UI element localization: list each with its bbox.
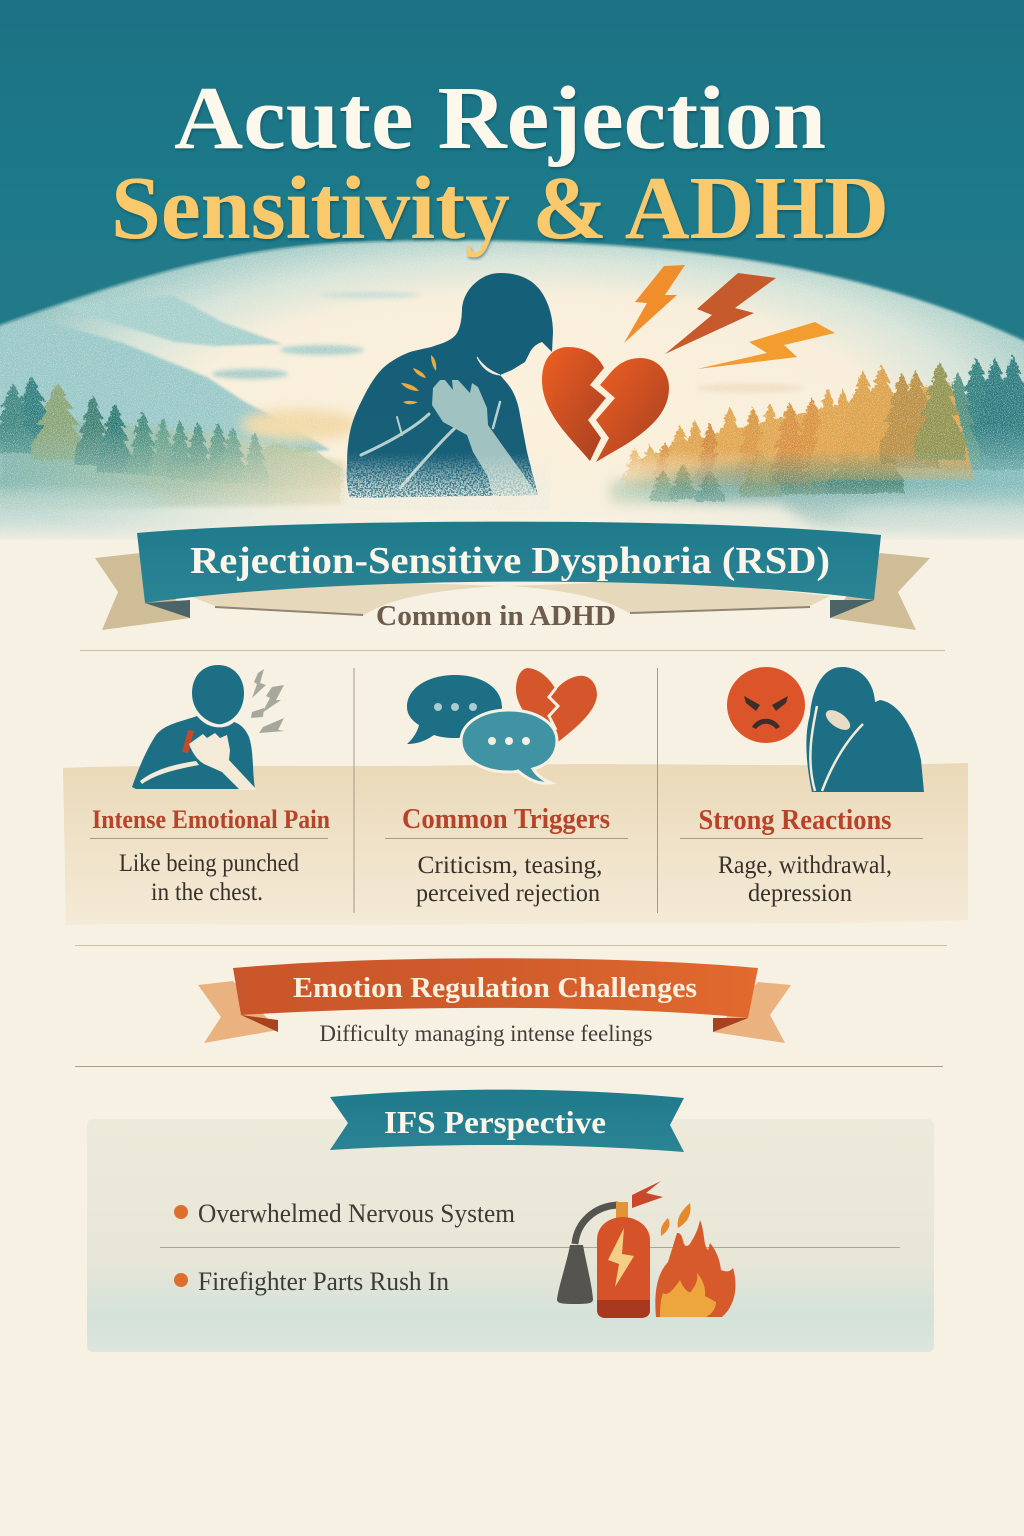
column 1: intense emotional pain <box>90 805 330 906</box>
broken heart <box>542 347 669 462</box>
lightning bolts <box>624 265 835 369</box>
title: Acute Rejection <box>174 69 826 168</box>
icon: speech bubbles and heart <box>407 668 597 783</box>
mountains <box>0 295 330 452</box>
spray <box>632 1181 663 1208</box>
hand and arm <box>189 733 257 790</box>
hero figure clutching chest <box>340 273 553 510</box>
right green understory <box>648 453 905 502</box>
arm and hand <box>432 380 538 495</box>
flame <box>655 1220 735 1317</box>
panel: IFS perspective <box>87 1119 934 1352</box>
icon: fire extinguisher and flame <box>557 1181 735 1318</box>
nozzle <box>557 1245 593 1304</box>
left forest mist <box>0 418 345 510</box>
title: Sensitivity & ADHD <box>111 159 889 258</box>
divider middle <box>75 945 947 946</box>
pain marks <box>401 355 436 404</box>
subtitle: difficulty managing: Difficulty managing intense feelings <box>320 1021 653 1046</box>
valve <box>616 1202 628 1218</box>
left forest trees <box>0 377 345 490</box>
divider column 2 <box>657 668 658 913</box>
divider top <box>80 650 945 651</box>
red pain bar <box>182 730 194 753</box>
panel: three column card <box>63 763 968 925</box>
column 1: intense emotional pain: Intense Emotional Pain <box>92 805 330 834</box>
column 1: intense emotional pain: in the chest. <box>151 879 263 906</box>
body crease lines <box>361 402 500 488</box>
subtitle: common in ADHD: Common in ADHD <box>376 600 616 632</box>
neck highlight <box>477 357 500 375</box>
banner: emotion regulation <box>198 958 791 1043</box>
divider lower <box>75 1066 943 1067</box>
panel row divider <box>160 1247 900 1248</box>
grey shock marks <box>251 669 285 733</box>
hero landscape <box>0 240 1024 540</box>
banner: RSD: Rejection-Sensitive Dysphoria (RSD) <box>190 540 830 582</box>
column 2: common triggers: Criticism, teasing, <box>418 852 602 879</box>
heart <box>516 668 597 742</box>
ribbon tails <box>95 553 190 630</box>
banner: emotion regulation: Emotion Regulation Challenges <box>293 972 697 1004</box>
column 3: strong reactions: Strong Reactions <box>698 805 892 836</box>
title <box>111 69 889 258</box>
banner: RSD <box>95 522 930 630</box>
ribbon folds <box>145 600 190 618</box>
ribbon swoop <box>190 580 500 616</box>
withdrawn person <box>806 667 924 792</box>
right teal trees <box>936 355 1024 470</box>
angry face <box>727 667 805 743</box>
header band <box>0 0 1024 356</box>
bullet: overwhelmed nervous system: Overwhelmed Nervous System <box>198 1199 515 1228</box>
column 2: common triggers: Common Triggers <box>402 804 610 835</box>
divider column 1 <box>354 668 355 913</box>
banner: IFS perspective: IFS Perspective <box>384 1104 606 1140</box>
right forest mist <box>610 420 1024 532</box>
clouds <box>212 292 805 393</box>
ribbon body <box>137 522 881 603</box>
dark bubble <box>407 675 502 744</box>
icon: angry face and withdrawn person <box>727 667 924 792</box>
cylinder bolt <box>608 1228 634 1287</box>
bullet: firefighter parts: Firefighter Parts Rush In <box>198 1267 449 1296</box>
figure speckle fade <box>340 450 550 510</box>
column 2: common triggers: perceived rejection <box>416 880 600 907</box>
column 3: strong reactions: Rage, withdrawal, <box>718 852 892 879</box>
column 3: strong reactions <box>680 805 923 907</box>
column 1: intense emotional pain: Like being punched <box>119 850 299 877</box>
small flames <box>661 1218 669 1236</box>
light bubble <box>461 710 557 783</box>
icon: person chest pain <box>132 665 285 790</box>
hose <box>575 1205 618 1244</box>
column 3: strong reactions: depression <box>748 880 852 907</box>
column 2: common triggers <box>385 804 628 907</box>
banner: IFS perspective <box>330 1090 684 1152</box>
left gold haze <box>240 409 360 441</box>
speckle texture <box>0 230 1024 540</box>
cylinder <box>597 1217 650 1318</box>
right orange trees <box>620 362 974 489</box>
bottom mist <box>840 503 1024 527</box>
